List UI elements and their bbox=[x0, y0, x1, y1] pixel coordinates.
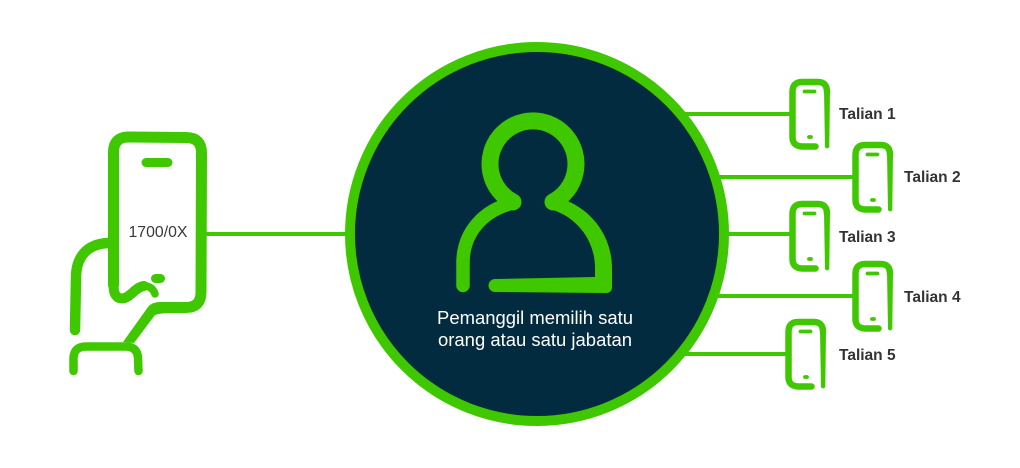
label 1: Talian 1 bbox=[839, 106, 896, 123]
phone 3 bbox=[792, 204, 830, 270]
caption: Pemanggil memilih satu bbox=[437, 307, 633, 328]
connector: caller to circle bbox=[205, 232, 350, 236]
phone body bbox=[114, 137, 202, 308]
wrist bbox=[123, 302, 171, 343]
phone 2 bbox=[856, 145, 893, 212]
label 4: Talian 4 bbox=[904, 289, 961, 306]
number label: 1700/0X bbox=[128, 224, 188, 241]
central circle bbox=[350, 47, 724, 421]
connector lines to phones bbox=[670, 114, 853, 354]
label 2: Talian 2 bbox=[904, 169, 961, 186]
icon: hand holding phone bbox=[74, 137, 202, 371]
phone 1 bbox=[792, 82, 830, 148]
cuff bbox=[74, 346, 138, 371]
thumb base bbox=[114, 285, 144, 298]
caption: orang atau satu jabatan bbox=[438, 329, 632, 350]
phone speaker bbox=[146, 158, 168, 167]
label 5: Talian 5 bbox=[839, 347, 896, 364]
phone 5 bbox=[788, 322, 826, 388]
thumb tip bbox=[142, 286, 155, 294]
icon: person bbox=[463, 121, 612, 293]
fingers bbox=[75, 243, 108, 330]
caption bbox=[437, 307, 633, 350]
label 3: Talian 3 bbox=[839, 229, 896, 246]
phone 4 bbox=[856, 264, 893, 330]
phone home button bbox=[156, 274, 160, 283]
